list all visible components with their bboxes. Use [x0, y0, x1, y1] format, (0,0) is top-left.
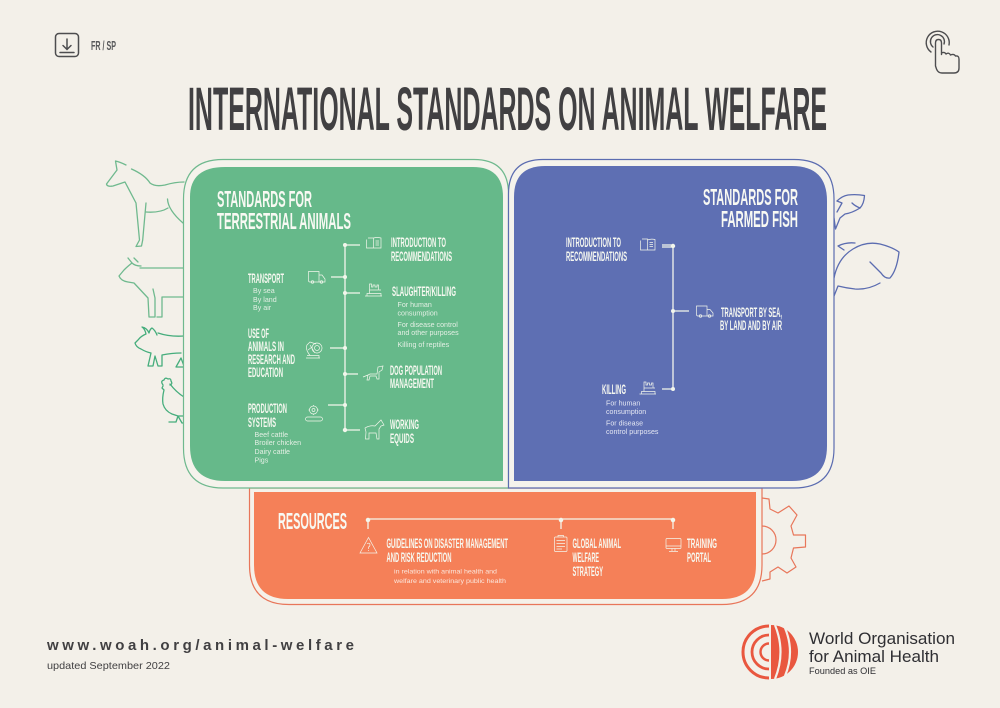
text: strategy: STRATEGY	[572, 564, 603, 579]
panel fill	[190, 167, 503, 481]
panel outline	[250, 488, 762, 604]
icon: touch hand	[926, 31, 959, 73]
text: working equids	[390, 417, 419, 446]
panel outline	[184, 160, 508, 488]
text: production systems: Pigs	[254, 456, 269, 464]
icon: factory	[640, 382, 656, 394]
panel: farmed fish: BY LAND AND BY AIR	[720, 318, 782, 333]
panel: terrestrial animals: DOG POPULATION	[390, 363, 442, 378]
logo text	[809, 630, 955, 676]
panel: farmed fish	[508, 160, 834, 488]
text: strategy: WELFARE	[572, 550, 599, 565]
download icon	[56, 34, 78, 56]
text: training portal	[687, 536, 717, 565]
panel: terrestrial animals: SLAUGHTER/KILLING	[392, 284, 456, 299]
panel: farmed fish: INTRODUCTION TO	[566, 235, 621, 250]
panel: terrestrial animals	[184, 160, 508, 488]
panel fill	[514, 166, 827, 481]
panel outline	[508, 160, 834, 488]
text: production systems: Broiler chicken	[254, 439, 301, 447]
icon: factory	[365, 284, 382, 296]
panel: terrestrial animals: INTRODUCTION TO	[391, 235, 446, 250]
text: introduction	[566, 235, 627, 264]
text: transport	[248, 271, 284, 312]
icon: strategy clipboard	[554, 536, 567, 552]
connector line	[366, 518, 675, 529]
panel: farmed fish: TRANSPORT BY SEA,	[721, 305, 782, 320]
heading: terrestrial	[217, 186, 351, 234]
text: production systems: Dairy cattle	[254, 448, 290, 456]
panel: terrestrial animals: TERRESTRIAL ANIMALS	[217, 208, 351, 234]
panel: farmed fish: RECOMMENDATIONS	[566, 249, 627, 264]
timeline	[662, 244, 689, 391]
text: slaughter: For disease control	[398, 321, 458, 329]
panel: farmed fish: FARMED FISH	[721, 206, 798, 232]
text: killing: consumption	[606, 408, 646, 416]
text: killing: For disease	[606, 420, 643, 428]
text: disaster guidelines: in relation with animal health and	[394, 569, 497, 576]
panel: resources	[250, 488, 806, 604]
text: dog population	[390, 363, 442, 391]
text: dog population: MANAGEMENT	[390, 376, 434, 391]
logo: WOAH	[743, 625, 955, 679]
panel: terrestrial animals: TRANSPORT	[248, 271, 284, 286]
panel: resources: GUIDELINES ON DISASTER MANAGEMENT	[386, 536, 508, 551]
gear outline	[762, 498, 806, 581]
panel: resources: RESOURCES	[278, 508, 347, 534]
text: introduction	[391, 235, 452, 264]
panel: resources: GLOBAL ANIMAL	[572, 536, 621, 551]
timeline	[328, 243, 360, 432]
text: research: USE OF	[248, 326, 269, 341]
text: disaster guidelines: AND RISK REDUCTION	[386, 550, 452, 565]
text: disaster guidelines	[386, 536, 508, 585]
text: transport: By sea	[253, 287, 275, 295]
icon: gear on conveyor	[306, 405, 322, 421]
text: production systems: SYSTEMS	[248, 415, 276, 430]
text: research: EDUCATION	[248, 365, 283, 380]
panel: terrestrial animals: WORKING	[390, 417, 419, 432]
text: production systems: Beef cattle	[254, 431, 288, 439]
icon: large fish outline	[834, 243, 899, 296]
text: slaughter: consumption	[398, 310, 438, 318]
text: production systems	[248, 401, 301, 464]
text: transport: By air	[253, 304, 272, 312]
text: slaughter: Killing of reptiles	[398, 341, 450, 349]
heading: terrestrial: STANDARDS FOR	[217, 186, 312, 212]
icon: pig outline	[135, 327, 184, 367]
text: research: ANIMALS IN	[248, 339, 284, 354]
logo mark	[743, 625, 798, 679]
panel: terrestrial animals: RECOMMENDATIONS	[391, 249, 452, 264]
text: killing: For human	[606, 400, 640, 408]
icon: horse outline	[106, 161, 184, 246]
logo text: for Animal Health	[809, 648, 939, 666]
icon: dog	[363, 366, 383, 380]
icon: lab equipment	[306, 342, 322, 358]
panel: resources: TRAINING	[687, 536, 717, 551]
text: production systems: PRODUCTION	[248, 401, 287, 416]
text: killing: control purposes	[606, 428, 659, 436]
logo text: World Organisation	[809, 630, 955, 648]
text: disaster guidelines: welfare and veterinary public health	[393, 578, 506, 585]
icon: warning	[360, 538, 377, 553]
icon: chicken outline	[162, 378, 184, 423]
text: slaughter: and other purposes	[398, 329, 459, 337]
text: slaughter: For human	[398, 301, 432, 309]
heading: farmed fish	[703, 184, 798, 232]
icon: truck	[308, 272, 325, 283]
icon: cow outline	[119, 258, 184, 317]
icon: truck	[696, 306, 713, 317]
text: transport	[720, 305, 782, 333]
panel fill	[254, 492, 756, 599]
logo text: Founded as OIE	[809, 666, 876, 676]
icon: equid	[365, 420, 384, 439]
text: training portal: PORTAL	[687, 550, 711, 565]
text: killing: KILLING	[602, 382, 626, 397]
panel: farmed fish: STANDARDS FOR	[703, 184, 798, 210]
text: strategy	[572, 536, 621, 579]
website url: www.woah.org/animal-welfare	[46, 637, 354, 654]
text: transport: By land	[253, 296, 277, 304]
icon: small fish outline	[834, 195, 864, 229]
panel: terrestrial animals: RESEARCH AND	[248, 352, 295, 367]
update note: updated September 2022	[47, 660, 170, 672]
text: working equids: EQUIDS	[390, 431, 414, 446]
icon: book	[366, 238, 381, 248]
text: killing	[602, 382, 659, 436]
text: slaughter	[392, 284, 459, 349]
icon: book	[640, 239, 655, 250]
icon: training monitor	[666, 538, 681, 552]
text: research	[248, 326, 295, 380]
language links: FR / SP	[91, 38, 116, 53]
